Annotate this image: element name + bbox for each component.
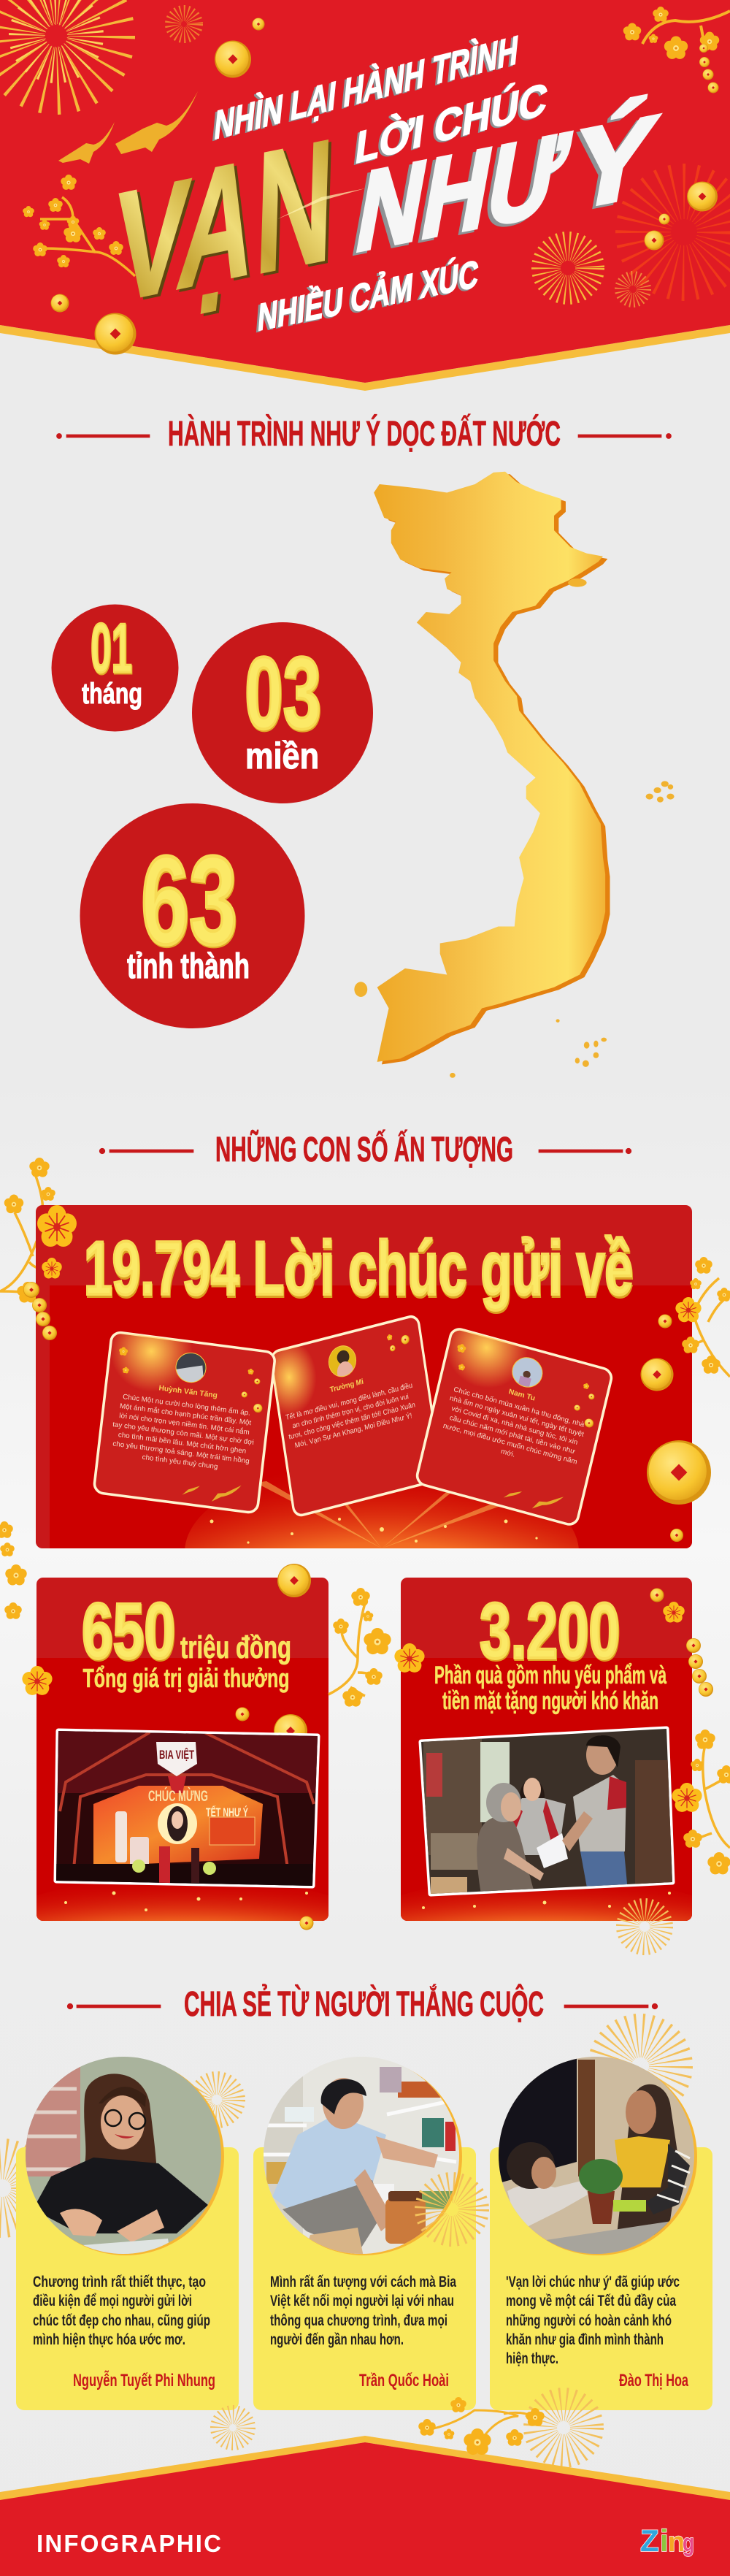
- heading: chia sẻ từ người thắng cuộc: [67, 1984, 658, 2024]
- firework: red right: [643, 191, 725, 273]
- coin group header: [51, 18, 718, 355]
- stat circle: 01 tháng: tháng: [82, 678, 142, 710]
- decorative branches beside stat panels: [4, 1564, 730, 1930]
- title line: vạn gold: Ạ: [171, 123, 266, 325]
- quote: Mình rất ấn tượng với cách mà Bia: [270, 2274, 456, 2290]
- message: nhà ấm no ngày xuân vui tết, ngày tết tuyệt: [449, 1394, 585, 1439]
- portrait ring: [265, 2058, 462, 2255]
- quote card: Trần Quốc Hoài: [253, 2052, 476, 2410]
- message: tươi, cho công việc thêm tấn tới! Chào Xuân: [288, 1401, 416, 1442]
- header banner: [0, 0, 730, 391]
- caption: Tổng giá trị giải thưởng: [83, 1663, 289, 1693]
- photo frame: [421, 1729, 672, 1894]
- title line: vạn gold: V: [113, 148, 197, 338]
- photo: gift handover: [421, 1729, 672, 1894]
- panel inner field: [50, 1285, 692, 1548]
- name: Nam Tu: [508, 1388, 536, 1403]
- fireworks behind quotes: [0, 2036, 671, 2217]
- map islands: [354, 578, 675, 1078]
- figure 3.200: 3.200: [480, 1588, 620, 1676]
- decorative coins and flowers around panel: [23, 1205, 730, 1542]
- figure 3.200: 3.200: [480, 1586, 620, 1675]
- message: cho yêu thương toả sáng. Một trái tim hồng: [112, 1440, 250, 1466]
- title line: lời chúc: LỜI CHÚC: [353, 74, 550, 174]
- stat circle: 63 tỉnh thành: [80, 803, 305, 1028]
- coin small: [235, 1708, 250, 1721]
- portrait: [259, 2052, 464, 2260]
- panel: 19.794 wishes: [36, 1205, 692, 1548]
- photo: stage: [51, 1727, 321, 1892]
- title line: vạn gold: V: [110, 145, 194, 336]
- panel: 650 million: [36, 1564, 328, 1921]
- branch left: [23, 175, 135, 276]
- message: cầu chúc năm mới phát tài, tiền vào như: [449, 1414, 576, 1456]
- name: Trường Mi: [329, 1377, 364, 1394]
- card: Nam Tu: [416, 1328, 613, 1526]
- panel base: [36, 1205, 692, 1548]
- photo: stage: TẾT NHƯ Ý: [206, 1805, 248, 1819]
- coin top: [277, 1564, 311, 1597]
- coin behind photo: [274, 1714, 307, 1748]
- message: an cho tình thêm trọn vị, cho đời luôn vui: [292, 1392, 410, 1431]
- header red field: [0, 0, 730, 383]
- footer red field: [0, 2442, 730, 2576]
- message: Một ánh mắt cho hạnh phúc trần đầy. Một: [119, 1402, 252, 1427]
- card cranes: [182, 1478, 242, 1505]
- decorative branch left of panel: [0, 1158, 55, 1556]
- message: cho tình yêu thuỷ chung: [142, 1453, 218, 1471]
- message: [109, 1392, 258, 1475]
- quote: khăn như gia đình mình thành: [506, 2331, 664, 2348]
- title line: như ý: Ý: [562, 91, 666, 235]
- header gold edge: [0, 325, 730, 391]
- map land: [374, 472, 605, 1062]
- message: lời nói cho trọn vẹn niềm tin. Một cái nắm: [119, 1412, 250, 1437]
- message: tay cho yêu thương còn mãi. Một sự chờ đợi: [112, 1421, 254, 1447]
- Zing logo: g: [683, 2529, 694, 2557]
- panel: 3.200 gifts: [401, 1578, 692, 1921]
- stat circle: 01 tháng: 01: [91, 609, 132, 687]
- quote: Việt kết nối mọi người lại với nhau: [270, 2293, 454, 2309]
- portrait ring: [27, 2058, 224, 2255]
- name: Nguyễn Tuyết Phi Nhung: [73, 2370, 215, 2390]
- stat circle: 03 miền: 03: [245, 635, 321, 750]
- caption: [434, 1662, 666, 1715]
- bottom glow: [185, 1481, 579, 1548]
- footer banner: [0, 2397, 730, 2576]
- message: Chúc Một nụ cười cho lòng thêm ấm áp.: [123, 1393, 250, 1418]
- title line: nhiều cảm xúc: NHIỀU CẢM XÚC: [256, 252, 480, 340]
- footer branch: [418, 2397, 545, 2455]
- infographic label: INFOGRAPHIC: [36, 2530, 221, 2557]
- message: [285, 1381, 418, 1451]
- quote: [506, 2274, 680, 2367]
- photo: stage: CHÚC MỪNG: [148, 1787, 208, 1805]
- name: Trần Quốc Hoài: [359, 2371, 449, 2390]
- coins: [386, 1329, 410, 1353]
- title line: vạn gold: Ạ: [174, 125, 269, 327]
- avatar: [328, 1346, 356, 1376]
- heading: những con số ấn tượng: NHỮNG CON SỐ ẤN TƯỢNG: [215, 1129, 513, 1169]
- message: [440, 1386, 587, 1475]
- Zing logo: [640, 2523, 694, 2558]
- avatar: [512, 1358, 542, 1387]
- heading: những con số ấn tượng: [99, 1129, 631, 1169]
- quote card: Đào Thị Hoa: [490, 2052, 712, 2410]
- photo frame: [56, 1731, 318, 1886]
- name: Huỳnh Văn Tăng: [158, 1384, 218, 1400]
- photo: stage: BIA VIỆT: [159, 1748, 194, 1762]
- stat circle: 01 tháng: 01: [91, 611, 133, 689]
- firework: top left: [11, 0, 101, 81]
- quote: [270, 2274, 456, 2348]
- quote: chúc tốt đẹp cho nhau, cũng giúp: [33, 2312, 210, 2329]
- quote: điều kiện để mọi người gửi lời: [33, 2293, 192, 2309]
- firework: small top: [173, 13, 195, 35]
- title line: lời chúc: LỜI CHÚC: [350, 75, 548, 175]
- title line: như ý: NHƯ: [344, 110, 573, 280]
- stat circle: 63 tỉnh thành: tỉnh thành: [127, 947, 250, 986]
- title line: vạn gold: N: [253, 102, 336, 310]
- portrait: [22, 2052, 226, 2260]
- message: Chúc cho bốn mùa xuân hạ thu đông, nhà: [453, 1386, 585, 1429]
- message: cho tình mãi bền lâu. Một chút hờn ghen: [118, 1431, 247, 1456]
- portrait ring: [500, 2058, 697, 2255]
- Zing logo: Z: [640, 2523, 659, 2558]
- card flowers and coins: [447, 1343, 604, 1429]
- fireworks over quote cards: [220, 2187, 587, 2451]
- branch top right: [623, 7, 730, 93]
- card flowers and coins: [114, 1347, 267, 1413]
- title line: nhiều cảm xúc: NHIỀU CẢM XÚC: [254, 253, 478, 341]
- card: Huỳnh Văn Tăng: [93, 1331, 276, 1513]
- gold glint: [277, 188, 365, 219]
- quote: hiện thực.: [506, 2350, 558, 2367]
- stat circle: 01 tháng: [51, 605, 178, 732]
- quote: Chương trình rất thiết thực, tạo: [33, 2274, 206, 2290]
- title line: như ý: NHƯ: [347, 107, 577, 277]
- message: Tết là mơ điều vui, mong điều lành, cầu điều: [285, 1381, 413, 1422]
- firework: gold centre right: [546, 246, 590, 290]
- avatar: [177, 1353, 206, 1382]
- firework above quotes: [628, 1910, 661, 1944]
- stat circle: 03 miền: [192, 622, 373, 803]
- quote: mình hiện thực hóa ước mơ.: [33, 2331, 185, 2348]
- portrait: [499, 2057, 694, 2254]
- map depth layer: [379, 474, 610, 1064]
- firework: small right: [622, 278, 644, 300]
- stat circle: 03 miền: miền: [245, 735, 319, 776]
- cranes: [58, 91, 198, 164]
- quote: thông qua chương trình, đưa mọi: [270, 2312, 447, 2329]
- title line: vạn gold: [110, 102, 339, 338]
- footer gold edge: [0, 2436, 730, 2501]
- title line: như ý: Ý: [558, 93, 662, 238]
- message: nước, mọi điều ước muốn chúc mừng năm: [442, 1422, 578, 1467]
- quote card: Nguyễn Tuyết Phi Nhung: [16, 2052, 239, 2410]
- unit: triệu đồng: [180, 1630, 291, 1665]
- message: mới.: [500, 1448, 516, 1459]
- figure 650: 650: [82, 1588, 176, 1676]
- stat circle: 63 tỉnh thành: 63: [142, 832, 238, 972]
- title line: vạn gold: N: [256, 104, 339, 313]
- quote: người đến gần nhau hơn.: [270, 2331, 404, 2348]
- message: Mới, Vạn Sự An Khang, Mọi Điều Như Ý!: [294, 1412, 412, 1450]
- card cranes: [503, 1481, 564, 1516]
- figure 650: 650: [82, 1586, 175, 1675]
- name: Đào Thị Hoa: [619, 2371, 688, 2390]
- card: Trường Mi: [273, 1315, 432, 1516]
- title line: nhiều cảm xúc: [254, 252, 480, 341]
- stat circle: 03 miền: 03: [245, 637, 322, 752]
- title line: nhìn lại hành trình: [210, 27, 520, 150]
- stat circle: 63 tỉnh thành: 63: [141, 830, 237, 971]
- quote: [33, 2274, 210, 2348]
- map of Vietnam: [354, 472, 675, 1078]
- Zing logo: n: [668, 2527, 685, 2558]
- message: vời Covid đi xa, nhà nhà sung túc, tôi xin: [450, 1404, 578, 1447]
- Zing logo: i: [660, 2523, 669, 2558]
